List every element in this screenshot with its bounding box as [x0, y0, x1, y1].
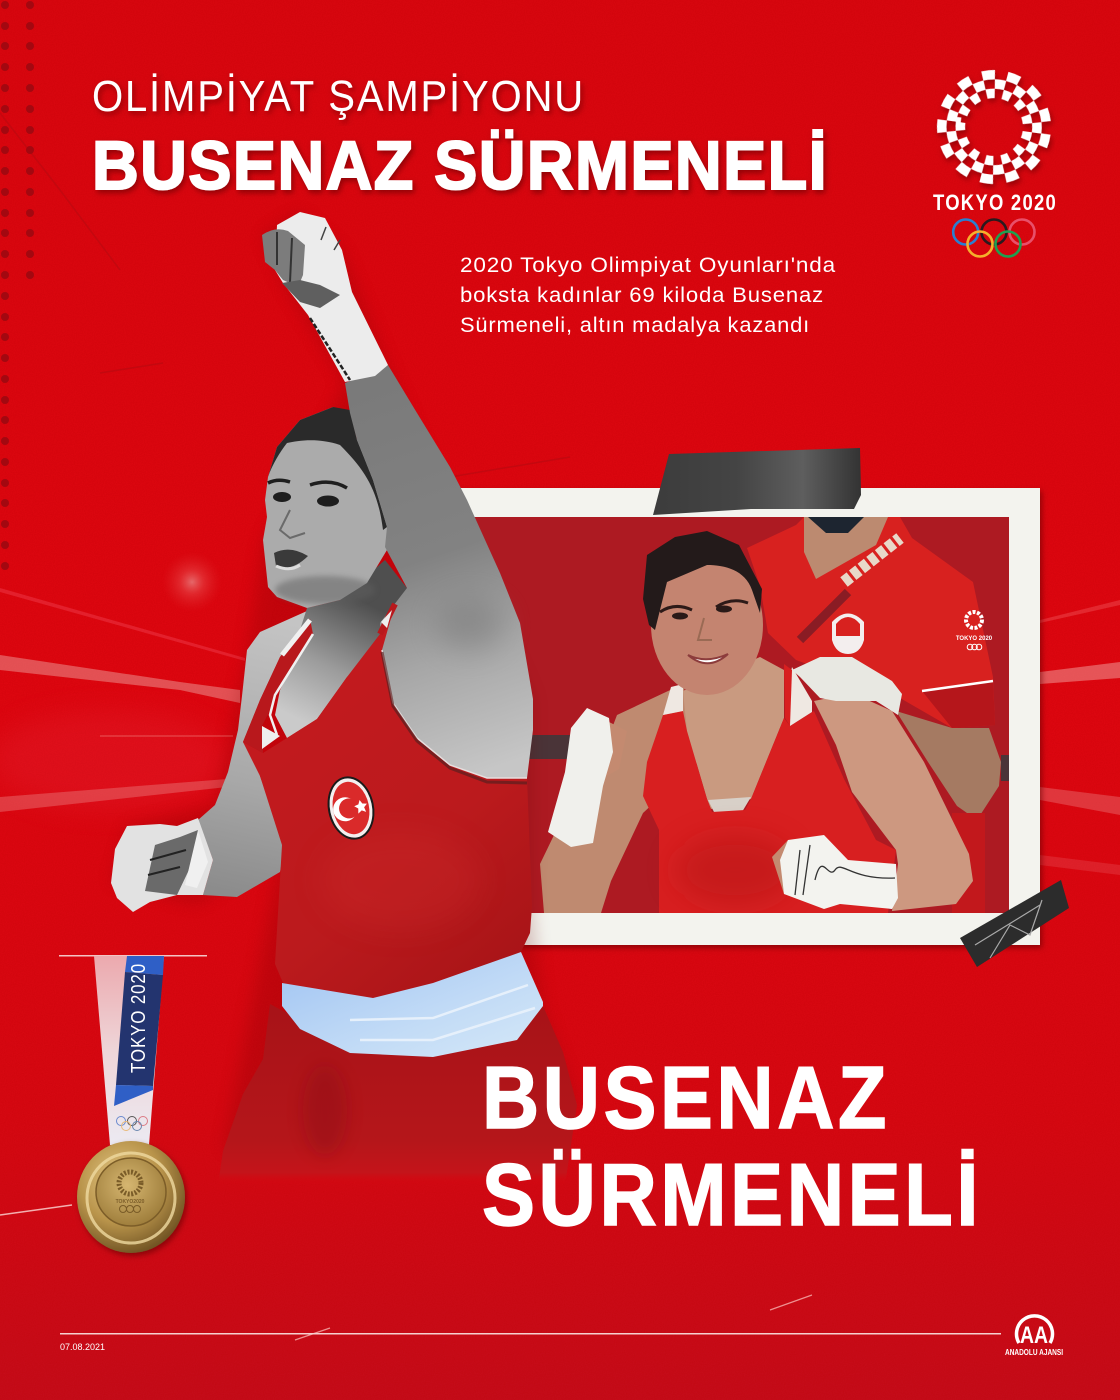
- athlete neck and chest: [683, 657, 784, 809]
- athlete face: [660, 601, 748, 612]
- athlete vest: [643, 711, 896, 913]
- vest far side: [952, 813, 985, 913]
- athlete right arm: [814, 693, 973, 911]
- medal top rule: [59, 955, 207, 956]
- athlete hair: [643, 531, 762, 630]
- face: [268, 480, 347, 488]
- medal disc: [77, 1141, 185, 1253]
- figure shadow: [111, 212, 577, 1151]
- photo: [460, 517, 1009, 913]
- coach shirt: [747, 517, 995, 728]
- undershirt: [708, 797, 751, 812]
- big name: SÜRMENELİ: [482, 1145, 982, 1244]
- left arm: [198, 611, 310, 897]
- background banner: [526, 735, 570, 759]
- chest: [275, 560, 407, 738]
- vest straps: [663, 684, 683, 715]
- coach glove: [792, 657, 902, 715]
- waistband: [282, 952, 543, 1057]
- frame: [450, 488, 1040, 945]
- description text: Sürmeneli, altın madalya kazandı: [460, 313, 810, 337]
- vest trim: [382, 650, 527, 778]
- right fist fingers: [772, 840, 788, 894]
- Tokyo 2020 logo: [933, 68, 1057, 256]
- main athlete figure: [111, 212, 577, 1185]
- tape bottom: [960, 880, 1069, 967]
- description text: [460, 253, 836, 337]
- tape top: [653, 448, 861, 515]
- title line 2: BUSENAZ SÜRMENELİ: [92, 127, 828, 204]
- head: [263, 407, 390, 608]
- big name: BUSENAZ: [482, 1048, 890, 1147]
- palm: [282, 280, 340, 308]
- right glove: [780, 835, 898, 909]
- AA letters: AA: [1020, 1322, 1048, 1349]
- hair: [268, 407, 387, 530]
- panel: photo frame: [450, 448, 1069, 967]
- light rays right: [1040, 600, 1120, 875]
- coach emblem: [832, 614, 864, 654]
- medal emblem: [119, 1172, 141, 1194]
- description text: 2020 Tokyo Olimpiyat Oyunları'nda: [460, 253, 836, 277]
- vest left strap: [243, 619, 313, 753]
- description text: boksta kadınlar 69 kiloda Busenaz: [460, 283, 824, 307]
- lower glove: [111, 818, 213, 912]
- medal: [59, 955, 207, 1253]
- decorative dots left edge: [1, 1, 34, 570]
- icon: olympic rings: [953, 220, 1034, 256]
- coach arm: [896, 711, 1001, 820]
- left glove: [548, 708, 613, 847]
- lanyard: [844, 538, 900, 582]
- title line 1: OLİMPİYAT ŞAMPİYONU: [92, 72, 585, 121]
- Anadolu Ajansi logo: [1005, 1316, 1063, 1357]
- coach neck: [804, 517, 888, 579]
- shorts: [218, 1004, 577, 1185]
- big name: [482, 1048, 982, 1244]
- logo wordmark: TOKYO 2020: [933, 190, 1057, 215]
- ribbon text: TOKYO 2020: [128, 963, 150, 1073]
- athlete left arm: [540, 684, 700, 913]
- raised arm: [345, 365, 533, 778]
- vest: [243, 604, 532, 998]
- vest emblem: [322, 772, 380, 844]
- coach logo: [966, 612, 982, 628]
- raised wrist wrap and fist: [275, 212, 388, 382]
- photo: TOKYO 2020: [956, 636, 993, 642]
- left fist fingers: [610, 722, 614, 732]
- light rays left: [0, 552, 245, 812]
- athlete head: [651, 555, 763, 695]
- ribbon rings: [116, 1116, 148, 1130]
- footer line: [60, 1333, 1001, 1334]
- ribbon blue stripes: [125, 956, 164, 975]
- fingers: [262, 229, 305, 287]
- medal: TOKYO2020: [116, 1199, 145, 1205]
- icon: checkered emblem: [935, 68, 1053, 186]
- logo caption: ANADOLU AJANSI: [1005, 1348, 1063, 1357]
- title: [92, 72, 828, 204]
- coach mask: [808, 517, 864, 533]
- icon: AA arc: [1016, 1316, 1052, 1343]
- ribbon: [94, 956, 164, 1145]
- date: 07.08.2021: [60, 1342, 105, 1352]
